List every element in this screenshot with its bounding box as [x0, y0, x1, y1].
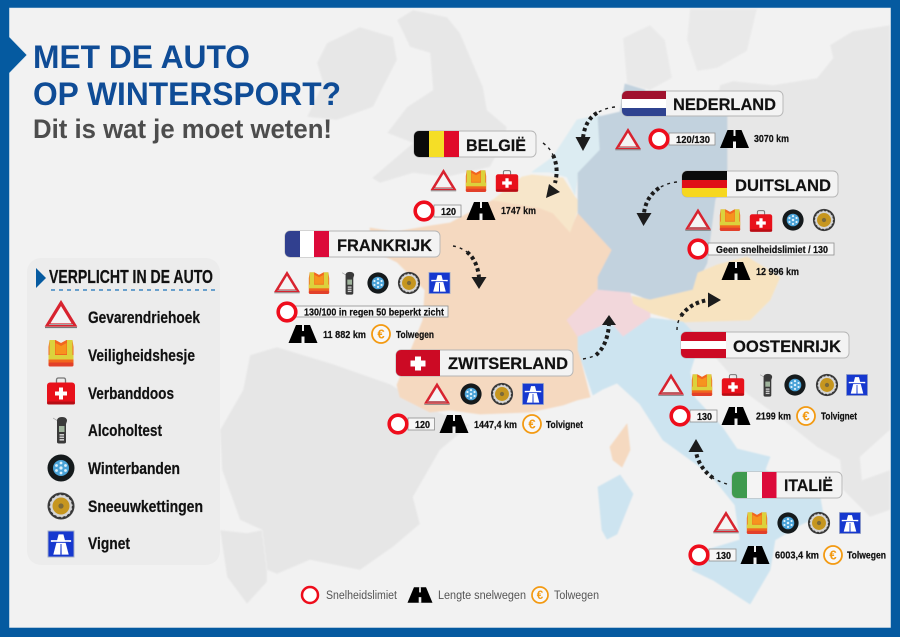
- label: België: BELGIË: [466, 136, 526, 155]
- speed limit: 130: [716, 550, 731, 562]
- label: Zwitserland: [396, 350, 573, 376]
- legend item: verbanddoos: [47, 378, 174, 404]
- icon: gevarendriehoek: [615, 130, 641, 150]
- country: Switzerland: [567, 290, 650, 337]
- motorway length: [740, 546, 819, 564]
- label: Duitsland: DUITSLAND: [735, 176, 831, 195]
- country: Austria: [632, 257, 780, 322]
- toll: [523, 415, 583, 433]
- country block: Zwitserland: [389, 350, 583, 433]
- label: Oostenrijk: [681, 332, 849, 358]
- motorway length: [288, 325, 366, 343]
- toll: €: [528, 416, 536, 432]
- icons: required equipment: [685, 209, 835, 232]
- legend item: alcoholtest: Alcoholtest: [88, 421, 162, 440]
- island: Sardinia: [598, 475, 633, 539]
- label: Nederland: NEDERLAND: [673, 95, 776, 114]
- panel: verplicht in de auto: [27, 258, 220, 565]
- legend item: gevarendriehoek: [45, 303, 200, 328]
- land: Ireland: [307, 27, 397, 120]
- label: Duitsland: [682, 171, 838, 197]
- motorway length: 2199 km: [756, 410, 791, 422]
- toll: Tolvignet: [546, 419, 583, 431]
- land: Great Britain: [372, 10, 507, 183]
- toll: Tolvignet: [821, 410, 857, 422]
- speed limit: 130/100 in regen 50 beperkt zicht: [304, 306, 444, 318]
- speed limit: Geen snelheidslimiet / 130: [716, 244, 828, 256]
- bottom legend: [302, 587, 599, 603]
- island: Corsica: [610, 424, 630, 467]
- label: Oostenrijk: OOSTENRIJK: [733, 337, 842, 356]
- arrow: Nederland: [576, 107, 615, 151]
- key: snelheidslimiet: Snelheidslimiet: [326, 590, 398, 602]
- label: Zwitserland: ZWITSERLAND: [448, 354, 568, 373]
- country block: België: [414, 131, 536, 220]
- arrow: België: [543, 143, 560, 198]
- label: Nederland: [622, 91, 783, 116]
- key: tolwegen: [532, 587, 599, 603]
- country: Belgium: [493, 175, 580, 232]
- label: Frankrijk: [285, 231, 440, 257]
- label: Frankrijk: FRANKRIJK: [337, 236, 433, 255]
- title: MET DE AUTO: [33, 39, 250, 75]
- icons: required equipment: [431, 170, 518, 192]
- country: Italy: [578, 318, 823, 604]
- toll: €: [802, 408, 810, 424]
- land: Portugal: [220, 530, 267, 604]
- motorway length: 11 882 km: [323, 329, 366, 341]
- speed limit: 120: [415, 419, 430, 431]
- country block: Duitsland: [682, 171, 838, 280]
- speed limit: 120: [441, 206, 456, 218]
- speed limit: 130: [697, 411, 712, 423]
- legend item: verbanddoos: Verbanddoos: [88, 384, 174, 403]
- speed limit: [671, 407, 717, 425]
- toll: [372, 325, 434, 343]
- icons: required equipment: [274, 272, 450, 295]
- speed limit: [389, 415, 434, 433]
- land: Scandinavia: [623, 9, 757, 90]
- toll: [824, 546, 886, 564]
- motorway length: 3070 km: [754, 133, 789, 145]
- background map of Europe: [220, 9, 890, 604]
- speed limit: [278, 303, 448, 321]
- speed limit: 120/130: [676, 134, 710, 146]
- motorway length: 1447,4 km: [474, 419, 517, 431]
- legend item: sneeuwkettingen: [48, 492, 203, 520]
- toll: €: [377, 326, 385, 342]
- arrow: Frankrijk: [453, 246, 486, 289]
- panel heading: VERPLICHT IN DE AUTO: [49, 266, 213, 287]
- key: tolwegen: €: [537, 590, 544, 602]
- legend item: veiligheidshesje: [48, 340, 195, 366]
- toll: €: [829, 548, 837, 562]
- panel heading: [36, 266, 216, 290]
- land: Eastern Europe: [640, 25, 890, 517]
- title: OP WINTERSPORT?: [33, 76, 341, 112]
- key: lengte snelwegen: Lengte snelwegen: [438, 590, 526, 602]
- title: [33, 39, 341, 112]
- arrow: Duitsland: [636, 182, 677, 226]
- subtitle: Dit is wat je moet weten!: [33, 114, 332, 144]
- motorway length: [722, 262, 799, 280]
- motorway length: [722, 407, 791, 425]
- legend item: alcoholtest: [53, 417, 162, 444]
- speed limit: [690, 546, 736, 564]
- country block: Italië: [690, 472, 886, 564]
- country block: Frankrijk: [274, 231, 450, 343]
- land: Spain: [220, 347, 470, 574]
- key: tolwegen: Tolwegen: [554, 590, 599, 602]
- arrow: Oostenrijk: [677, 292, 721, 330]
- toll: Tolwegen: [847, 550, 886, 562]
- legend item: veiligheidshesje: Veiligheidshesje: [88, 346, 195, 365]
- key: snelheidslimiet: [302, 587, 398, 603]
- legend item: sneeuwkettingen: Sneeuwkettingen: [88, 497, 203, 516]
- country: Germany: [578, 84, 727, 300]
- motorway length: [720, 130, 789, 148]
- country: France: [370, 200, 612, 414]
- arrow: Italië: [688, 439, 727, 484]
- motorway length: 1747 km: [501, 205, 536, 217]
- legend item: vignet: Vignet: [88, 534, 130, 553]
- country block: Oostenrijk: [658, 332, 868, 425]
- label: Italië: [732, 472, 842, 498]
- legend item: winterbanden: [48, 454, 180, 482]
- key: lengte snelwegen: [408, 587, 526, 603]
- speed limit: [650, 130, 715, 148]
- legend item: gevarendriehoek: Gevarendriehoek: [88, 308, 200, 327]
- legend item: vignet: [48, 531, 130, 557]
- motorway length: 12 996 km: [756, 266, 799, 278]
- icons: required equipment: [424, 383, 544, 405]
- label: Italië: ITALIË: [784, 476, 833, 495]
- speed limit: [689, 240, 834, 258]
- legend item: winterbanden: Winterbanden: [88, 459, 180, 478]
- motorway length: 6003,4 km: [775, 550, 819, 562]
- arrow: Zwitserland: [583, 315, 616, 359]
- icons: required equipment: [658, 374, 868, 397]
- country: Netherlands: [532, 115, 600, 195]
- toll: Tolwegen: [396, 329, 434, 341]
- icons: required equipment: [713, 512, 861, 534]
- motorway length: [440, 415, 517, 433]
- toll: [797, 407, 857, 425]
- country block: Nederland: [615, 91, 789, 150]
